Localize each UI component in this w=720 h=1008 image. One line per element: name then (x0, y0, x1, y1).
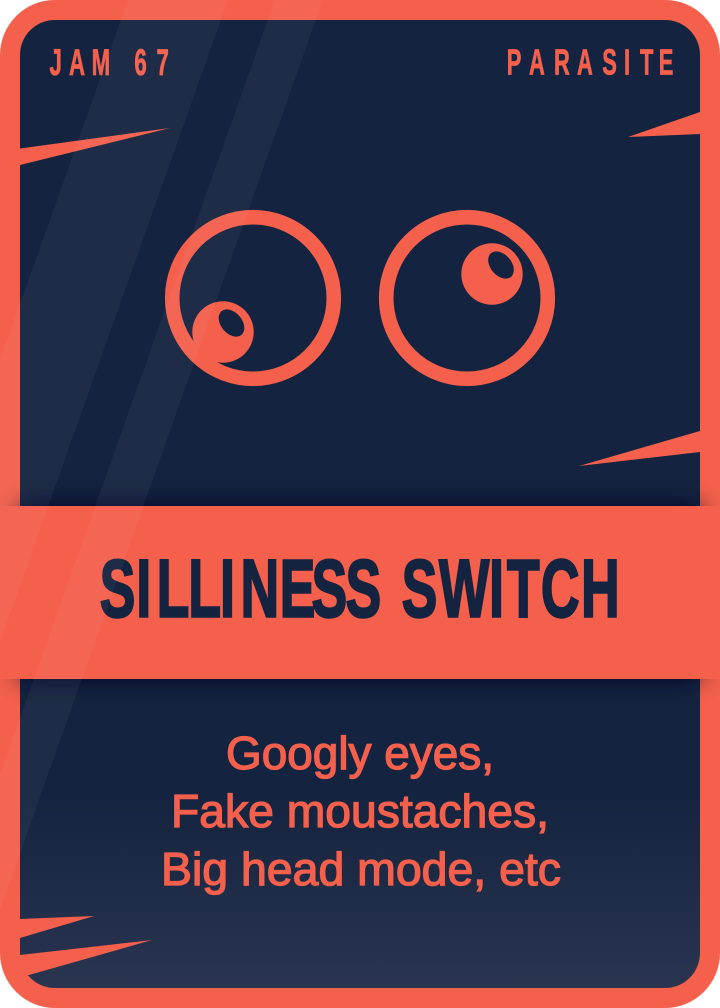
title: SILLINESS SWITCH (100, 542, 620, 634)
label: category: PARASITE (507, 43, 673, 83)
icon: right eye (386, 217, 548, 379)
banner (0, 506, 720, 679)
spike: bottom left upper (20, 916, 94, 938)
glass reflection bands (20, 20, 316, 852)
spike: middle right (579, 431, 700, 466)
description line 2: Fake moustaches, (171, 785, 549, 837)
description text (161, 727, 561, 895)
label: jam number: JAM 67 (49, 42, 169, 83)
icon: left eye (172, 217, 334, 379)
spike: bottom left lower (15, 940, 152, 975)
spike: top right (628, 112, 700, 137)
description line 3: Big head mode, etc (161, 843, 561, 895)
icon: googly eyes (172, 217, 548, 379)
spike: top left (20, 128, 170, 165)
banner shadow (20, 506, 700, 679)
description line 1: Googly eyes, (226, 727, 494, 779)
